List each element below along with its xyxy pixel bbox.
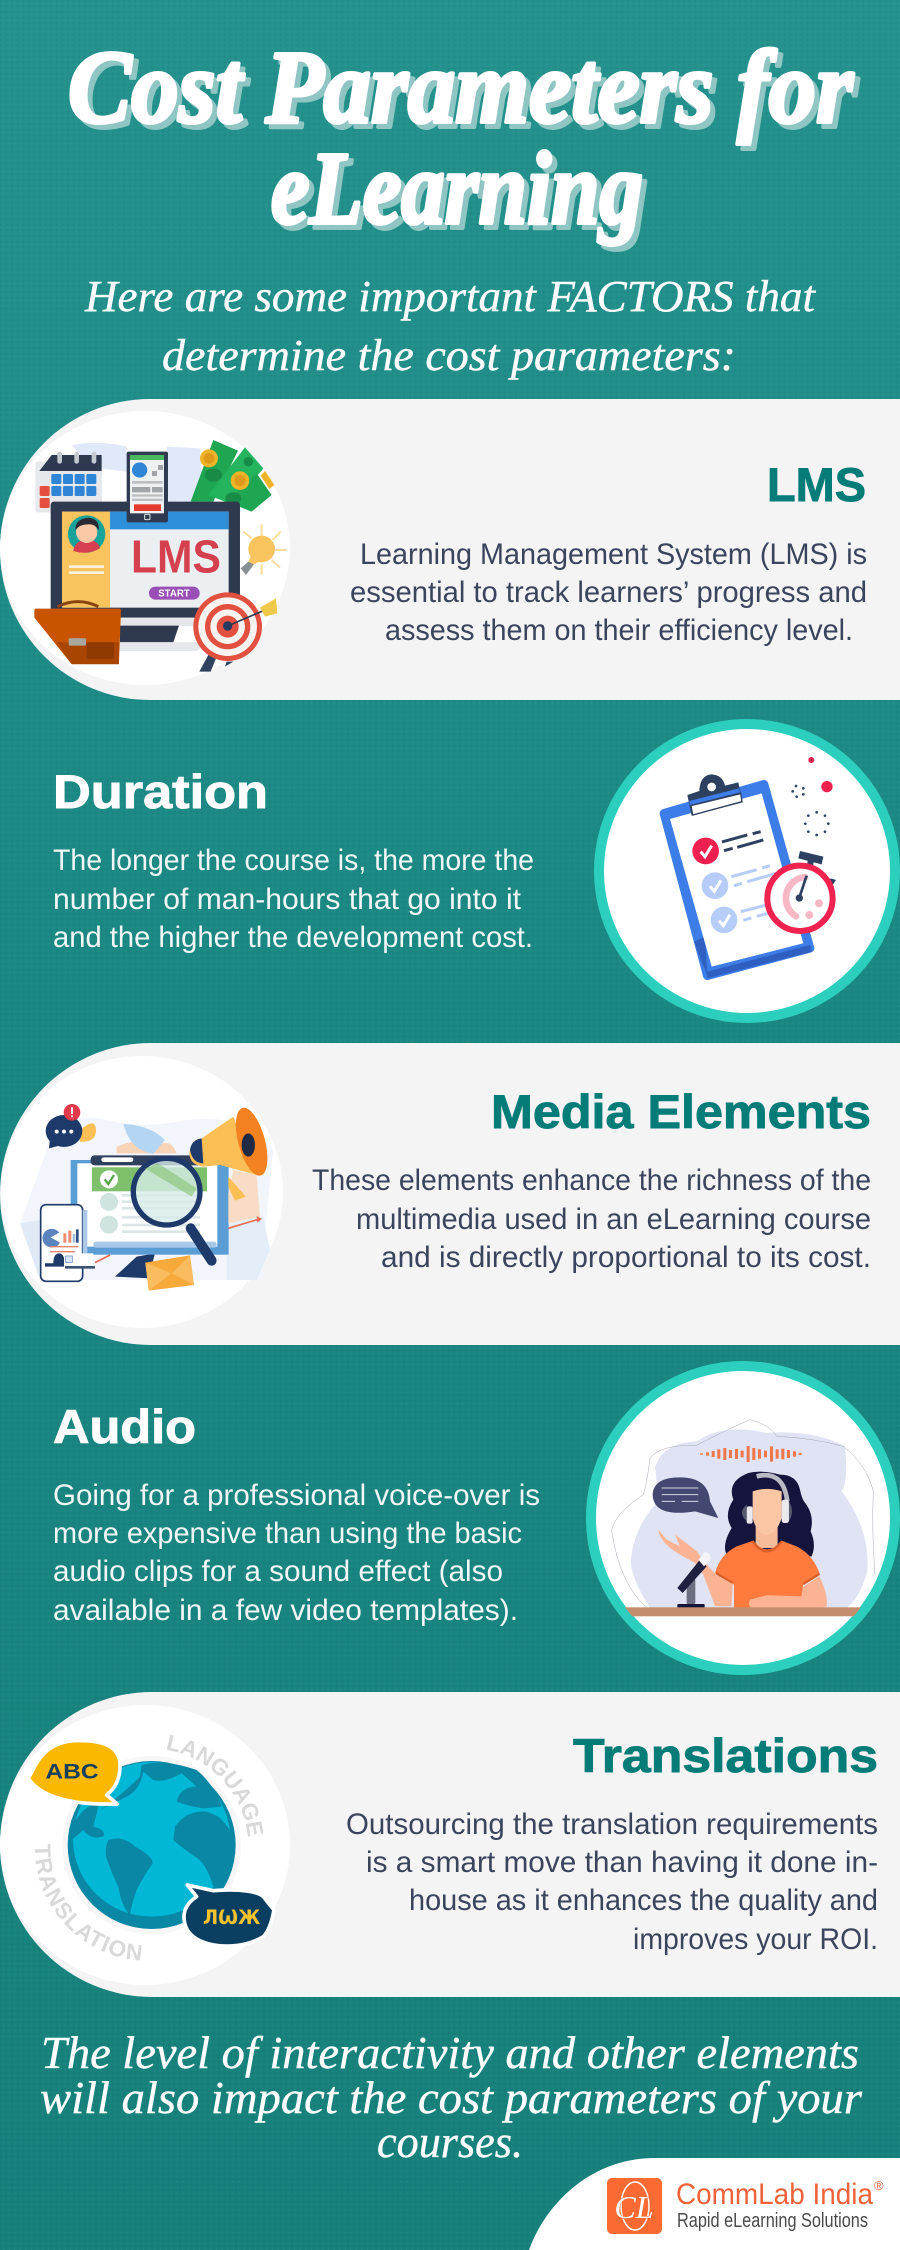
text: Duration description: number of man-hours that go into it (53, 883, 522, 916)
text: LMS description (350, 538, 867, 647)
logo text: ® (874, 2178, 884, 2193)
text: Media Elements description: These elements enhance the richness of the (312, 1164, 871, 1197)
heading: Audio: Audio (53, 1400, 196, 1453)
closing statement (40, 2027, 863, 2167)
icon: stopwatch (767, 851, 836, 931)
logo text: CommLab India (676, 2178, 873, 2211)
text: Translations description: house as it enhances the quality and (409, 1884, 878, 1917)
text: Translations description (346, 1808, 878, 1956)
text: Audio description: available in a few video templates). (53, 1594, 518, 1627)
bubble: Cyrillic (184, 1885, 274, 1946)
icon: phone chart (41, 1205, 95, 1281)
text: Translations description: is a smart move than having it done in- (366, 1846, 878, 1879)
text: LMS description: Learning Management System (LMS) is (360, 538, 867, 571)
icon: headphones (742, 1475, 792, 1524)
logo text (676, 2178, 884, 2232)
bubble: Cyrillic: ЛѠЖ (203, 1906, 261, 1929)
text: Audio description: Going for a professional voice-over is (53, 1479, 540, 1512)
subtitle: determine the cost parameters: (162, 331, 736, 380)
closing statement: will also impact the cost parameters of your (40, 2072, 863, 2123)
icon: envelope (145, 1255, 194, 1291)
panel: Translations (0, 1692, 900, 1997)
icon: media illustration (20, 1104, 274, 1291)
bubble: ABC: ABC (45, 1760, 99, 1784)
text: Translations description: Outsourcing the translation requirements (346, 1808, 878, 1841)
icon: clip (687, 774, 743, 816)
hair (725, 1472, 814, 1556)
subtitle (84, 272, 817, 380)
icon: lightbulb (241, 524, 287, 575)
panel: Audio (53, 1366, 895, 1670)
icon: clipboard and stopwatch (599, 724, 895, 1018)
globe (62, 1756, 241, 1934)
icon: LMS computer (35, 440, 287, 672)
text: Media Elements description: and is directly proportional to its cost. (381, 1241, 871, 1274)
text: Audio description (53, 1479, 540, 1627)
closing statement: courses. (377, 2116, 523, 2167)
heading: LMS: LMS (767, 458, 866, 511)
icon: monitor (51, 502, 240, 651)
icon: speech bubble (653, 1477, 718, 1518)
icon: calendar (35, 452, 102, 512)
text: Duration description: and the higher the development cost. (53, 921, 533, 954)
text: Audio description: audio clips for a sound effect (also (53, 1555, 503, 1588)
icon: megaphone (189, 1104, 274, 1223)
person (658, 1489, 827, 1610)
bubble: ABC (28, 1741, 120, 1804)
icon: briefcase (36, 602, 119, 664)
curved label: TRANSLATION: TRANSLATION (34, 1844, 142, 1960)
text: Media Elements description: multimedia used in an eLearning course (356, 1203, 871, 1236)
text: LMS description: assess them on their efficiency level. (385, 614, 853, 647)
icon: CL logo: CL (614, 2189, 654, 2225)
icon: target (193, 592, 277, 672)
panel: Duration (53, 724, 895, 1018)
icon: sound wave (700, 1446, 802, 1462)
icon: window (71, 1155, 229, 1278)
panel: Media Elements (0, 1043, 900, 1345)
icon: CL logo (607, 2178, 662, 2234)
text: Duration description (53, 844, 534, 954)
title (68, 30, 859, 251)
text: Media Elements description (312, 1164, 871, 1274)
text: Duration description: The longer the course is, the more the (53, 844, 534, 877)
title: eLearning (271, 131, 643, 246)
icon: magnifier (133, 1158, 212, 1261)
icon: chat bubbles (46, 1104, 96, 1148)
panel: CommLab logo (529, 2158, 900, 2250)
heading: Duration: Duration (53, 765, 268, 818)
heading: Translations: Translations (573, 1729, 878, 1782)
text: Translations description: improves your ROI. (633, 1923, 878, 1956)
panel: LMS (0, 399, 900, 700)
icon: microphone (677, 1552, 710, 1608)
icon: monitor: START (158, 589, 190, 600)
text: Audio description: more expensive than using the basic (53, 1517, 522, 1550)
heading: Media Elements: Media Elements (491, 1085, 871, 1138)
icon: money (191, 440, 274, 512)
curved label: LANGUAGE: LANGUAGE (167, 1734, 264, 1836)
icon: dots (791, 757, 833, 836)
subtitle: Here are some important FACTORS that (84, 272, 817, 321)
closing statement: The level of interactivity and other elements (41, 2027, 859, 2078)
icon: podcaster (591, 1366, 895, 1670)
icon: monitor: LMS (131, 530, 221, 582)
icon: globe with speech bubbles (30, 1734, 276, 1960)
text: LMS description: essential to track learners’ progress and (350, 576, 867, 609)
title: eLearning (276, 136, 648, 251)
icon: phone (127, 452, 168, 522)
